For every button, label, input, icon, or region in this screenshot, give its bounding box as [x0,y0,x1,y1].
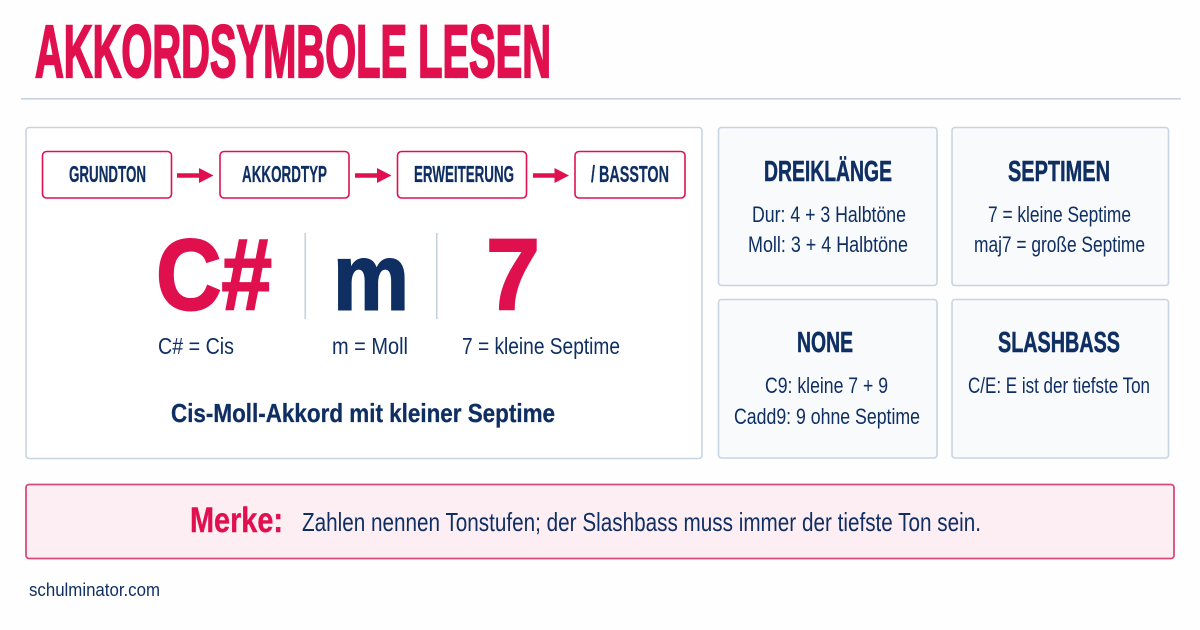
card: Dreiklänge: Moll: 3 + 4 Halbtöne [748,232,908,257]
summary: Cis-Moll-Akkord mit kleiner Septime [171,398,555,428]
chip: Grundton [42,152,172,198]
card: Septimen: 7 = kleine Septime [988,202,1131,227]
card: Slashbass [952,300,1168,458]
arrow 3 [533,168,569,183]
label: 7: 7 = kleine Septime [462,333,620,359]
arrow 2 [355,168,392,183]
card: Septimen: SEPTIMEN [1008,156,1110,188]
chord symbol: C#m7 [156,220,540,332]
symbol: m: m [333,224,409,330]
footer: source: schulminator.com [29,580,160,600]
card: None: C9: kleine 7 + 9 [765,373,888,398]
chip: Basston [575,152,685,198]
arrow 1 [177,168,214,183]
callout: Merke: Merke: [190,501,283,540]
chip: Akkordtyp: AKKORDTYP [242,161,327,187]
card: Septimen [952,128,1168,286]
symbol: 7: 7 [486,220,540,332]
symbol: C#: C# [156,220,272,332]
card: None: Cadd9: 9 ohne Septime [734,404,920,429]
chip: Erweiterung [398,152,526,198]
card: None [718,300,937,458]
label: m: m = Moll [332,333,408,359]
title: AKKORDSYMBOLE LESEN [35,10,551,93]
card: Dreiklänge [718,128,937,286]
card: Slashbass: SLASHBASS [998,327,1120,359]
card: Septimen: maj7 = große Septime [974,232,1145,257]
chip: Akkordtyp [220,152,349,198]
panel: chord breakdown [26,128,702,458]
card: Dreiklänge: DREIKLÄNGE [764,155,892,188]
card: Slashbass: C/E: E ist der tiefste Ton [968,373,1150,398]
label: C#: C# = Cis [158,333,234,359]
chip: Erweiterung: ERWEITERUNG [414,161,514,187]
flow: chord symbol order [42,152,685,198]
chip: Grundton: GRUNDTON [69,161,146,187]
chip: Basston: / BASSTON [591,161,669,187]
callout: Merke [26,484,1174,558]
callout: Merke: Zahlen nennen Tonstufen; der Slashbass muss immer der tiefste Ton sein. [302,507,981,537]
card: Dreiklänge: Dur: 4 + 3 Halbtöne [752,202,906,227]
card: None: NONE [797,327,853,359]
